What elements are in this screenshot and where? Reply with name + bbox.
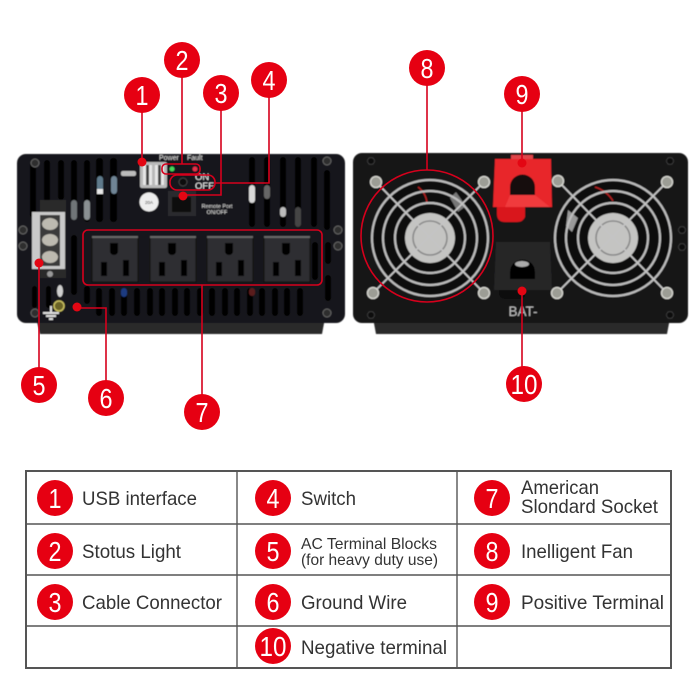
slot reflections [71, 176, 301, 297]
callout 8: fan leader [361, 68, 493, 302]
power and fault labels [159, 155, 203, 162]
badge 8 [409, 50, 445, 86]
BAT- label: BAT- [508, 304, 538, 319]
legend item 5: (for heavy duty use) [301, 552, 438, 569]
badge 2: 2 [176, 45, 188, 76]
legend item 3: 3 [48, 587, 62, 618]
on off switch: ON [195, 172, 209, 183]
panel: inverter rear view [353, 153, 688, 334]
badge 8: 8 [420, 53, 434, 84]
legend item 6: Ground Wire [301, 592, 407, 614]
on off switch [179, 172, 214, 192]
legend item 4: 4 [266, 483, 280, 514]
legend item 5: AC Terminal Blocks [301, 536, 437, 553]
legend item 7 [474, 477, 659, 518]
remote port label [202, 204, 233, 216]
legend item 9: Positive Terminal [521, 592, 664, 614]
power and fault labels: Fault [187, 155, 203, 162]
badge 5: 5 [32, 370, 46, 401]
table grid [26, 471, 671, 668]
round sticker [140, 192, 158, 212]
legend item 2: Stotus Light [82, 541, 182, 563]
badge 4: 4 [262, 65, 276, 96]
USB icon label [121, 171, 136, 176]
badge 1: 1 [136, 80, 148, 111]
cable connector port [168, 191, 196, 216]
AC outlets [92, 236, 310, 282]
status LEDs [170, 166, 198, 172]
remote port label: Remote Port [202, 204, 233, 210]
badge 5 [21, 367, 57, 403]
round sticker: 20A [145, 200, 153, 205]
legend item 9: 9 [486, 587, 498, 618]
callout 6: ground leader [72, 302, 106, 398]
legend item 8: Inelligent Fan [521, 541, 633, 563]
right fan [552, 176, 672, 298]
legend item 2 [37, 533, 182, 569]
badge 1 [124, 77, 160, 113]
on off switch: OFF [195, 181, 214, 192]
badge 3 [203, 75, 239, 111]
legend item 1: 1 [48, 483, 62, 514]
negative terminal black cover [494, 242, 552, 299]
legend item 10: 10 [260, 631, 286, 662]
corner screws [368, 158, 686, 318]
legend table [26, 471, 671, 668]
legend item 6: 6 [266, 587, 280, 618]
remote port label: ON/OFF [207, 210, 228, 216]
badge 9: 9 [516, 79, 528, 110]
front chassis body [17, 154, 345, 323]
legend item 8 [474, 533, 633, 569]
callout 9: positive leader [518, 94, 526, 168]
badge 7 [184, 394, 220, 430]
legend item 5: 5 [266, 536, 280, 567]
rear mounting foot [373, 318, 670, 334]
callout 10: negative leader [518, 286, 526, 384]
badge 3: 3 [214, 78, 228, 109]
legend item 7: Slondard Socket [521, 496, 659, 518]
badge 7: 7 [196, 397, 208, 428]
legend item 4 [255, 480, 356, 516]
legend item 3: Cable Connector [82, 592, 222, 614]
callout 1: USB leader [138, 95, 146, 166]
legend item 5 [255, 533, 438, 569]
USB ports [140, 162, 167, 188]
legend item 7: American [521, 477, 599, 499]
AC terminal block [32, 200, 66, 278]
legend item 2: 2 [48, 536, 62, 567]
ground terminal [43, 285, 64, 319]
badge 4 [251, 62, 287, 98]
legend item 9 [474, 584, 664, 620]
callout 3: cable connector leader [178, 93, 221, 200]
front mounting foot [36, 318, 325, 334]
rear chassis body [353, 153, 688, 323]
legend item 8: 8 [486, 536, 498, 567]
badge 6: 6 [100, 383, 112, 414]
callout 2: status light leader [162, 60, 200, 174]
power and fault labels: Power [159, 155, 180, 162]
callout 4: switch leader [170, 80, 269, 190]
legend item 10: Negative terminal [301, 637, 447, 659]
legend item 4: Switch [301, 488, 356, 510]
legend item 7: 7 [486, 483, 498, 514]
callout 5: terminal block leader [34, 258, 44, 385]
positive terminal red cover [493, 155, 552, 222]
legend item 1: USB interface [82, 488, 197, 510]
panel screws [19, 157, 342, 317]
panel: inverter front view [17, 154, 345, 334]
legend item 6 [255, 584, 407, 620]
badge 2 [164, 42, 200, 78]
callout 7: socket leader [83, 230, 322, 412]
left fan [368, 176, 490, 298]
legend item 1 [37, 480, 197, 516]
badge 10: 10 [510, 369, 538, 400]
ventilation slots [30, 157, 331, 316]
badge 6 [88, 380, 124, 416]
badge 9 [504, 76, 540, 112]
legend item 3 [37, 584, 222, 620]
legend item 10 [255, 628, 447, 664]
